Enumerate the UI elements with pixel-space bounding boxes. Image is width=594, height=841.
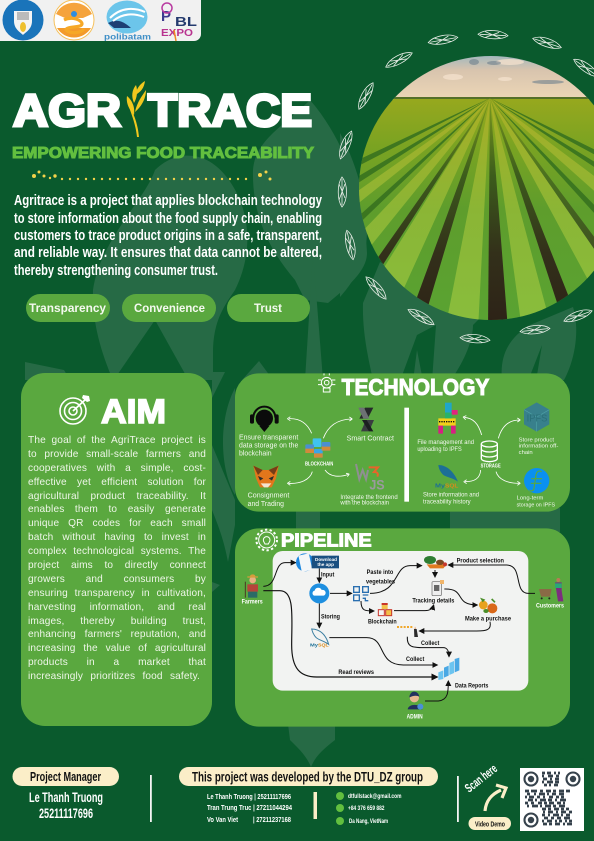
value pills	[26, 294, 310, 322]
pipeline labels: Tracking details	[412, 597, 455, 604]
pipeline labels: Collect	[421, 640, 440, 647]
icon: headset	[250, 407, 279, 432]
admin: ADMIN	[407, 714, 423, 720]
aim body text: enables them to easily generate	[28, 504, 206, 515]
blockchain group	[239, 407, 398, 508]
logo: PBL expo: BL	[175, 14, 197, 29]
admin	[407, 692, 423, 720]
pipeline labels: Make a purchase	[465, 616, 511, 623]
icon: wheat	[127, 81, 146, 137]
arrow: scan	[485, 785, 506, 811]
icon: bulb	[318, 373, 335, 392]
aim body text: increasingly prioritizes food safety.	[28, 671, 200, 682]
aim body text: effective yet efficient solution for	[28, 477, 206, 488]
text: ensure transparent	[239, 432, 298, 458]
text: smart contract: Smart Contract	[347, 434, 394, 443]
icon: blockchain cubes	[305, 438, 330, 458]
project manager: Project Manager	[30, 769, 101, 784]
label: storage: STORAGE	[481, 463, 501, 469]
text: ensure transparent: Ensure transparent	[239, 432, 298, 441]
aim body text: unique QR codes for each small	[28, 518, 206, 529]
icon: blockchain cubes	[378, 603, 392, 616]
pipeline labels	[321, 557, 511, 689]
aim body text: images, thereby building trust,	[28, 616, 206, 627]
subtitle: EMPOWERING FOOD TRACEABILITY	[12, 145, 315, 162]
contacts: Da Nang, VietNam	[349, 819, 388, 825]
logo: polibatam	[104, 0, 152, 42]
icon: stars rating	[397, 626, 418, 637]
icon: target	[59, 395, 90, 425]
title text: TRACE: TRACE	[148, 85, 312, 136]
icon: mysql: My	[435, 483, 445, 489]
team heading: This project was developed by the DTU_DZ group	[192, 770, 423, 784]
text: consignment: Consignment	[248, 491, 289, 500]
team heading	[179, 767, 438, 786]
icon: mysql: SQL	[445, 483, 459, 489]
text: long-term: storage on IPFS	[517, 503, 555, 509]
pipeline labels: Product selection	[457, 557, 504, 564]
tech divider	[404, 408, 409, 502]
icon: web3js: JS	[369, 476, 385, 492]
title	[12, 81, 315, 180]
text: store information: Store information and	[423, 493, 479, 499]
arrows: blockchain	[287, 417, 352, 485]
text: ensure transparent: blockchain	[239, 449, 272, 458]
text: consignment: and Trading	[248, 499, 284, 508]
team members: | 27211237168	[253, 815, 291, 824]
icon: customers: Customers	[536, 602, 564, 609]
panel: technology	[235, 373, 570, 512]
icon: ipfs cube	[524, 402, 549, 432]
text: store information: traceability history	[423, 499, 471, 505]
logo: polibatam: polibatam	[104, 32, 152, 42]
farm photo circle with leaf ring	[338, 30, 594, 344]
panel: pipeline	[235, 528, 570, 727]
aim body text: enhancing farmers' reputation, and	[28, 629, 206, 640]
text: store information	[423, 493, 479, 505]
icon: pinata	[438, 403, 458, 434]
crop rows	[359, 98, 594, 320]
icon: vegetables	[424, 556, 447, 568]
aim body text: The goal of the AgriTrace project is	[28, 435, 206, 446]
aim body text: products in a market that	[28, 657, 206, 668]
text: web3: with the blockchain	[339, 501, 389, 507]
pill: transparency: Transparency	[29, 303, 107, 315]
pill: convenience	[122, 294, 216, 322]
heading: technology: TECHNOLOGY	[342, 374, 489, 400]
pipeline labels: Storing	[321, 613, 340, 620]
icon: mysql	[310, 629, 329, 648]
aim body text: project aims to directly connect	[28, 560, 206, 571]
aim body text: cooperatives with a simple, cost-	[28, 463, 206, 474]
aim body text: complex technological systems. The	[28, 546, 206, 557]
download the app: the app	[317, 562, 334, 567]
contacts	[336, 792, 402, 825]
intro paragraph	[14, 192, 322, 279]
qr code	[520, 768, 584, 831]
farmers	[242, 574, 263, 605]
icon: smart contract	[358, 408, 374, 431]
icon: metamask fox	[253, 466, 279, 487]
diagram area	[273, 551, 528, 691]
text: long-term: Long-term	[517, 495, 544, 501]
text: consignment	[248, 491, 289, 508]
team members: Tran Trung Truc | 27211044294	[207, 803, 293, 812]
pill: transparency	[26, 294, 110, 322]
intro paragraph: thereby strengthening consumer trust.	[14, 262, 218, 279]
aim body text: increasing the value of agricultural	[28, 643, 206, 654]
icon: filecoin	[524, 468, 549, 493]
aim body text: harvesting information, and real	[28, 602, 206, 613]
aim body text: ensuring transparency in cultivation,	[28, 588, 206, 599]
icon: mysql: SQL	[318, 643, 329, 648]
text: ensure transparent: data storage on the	[239, 440, 298, 449]
logo: PBL expo: EXPO	[161, 27, 193, 39]
pipeline labels: Paste into	[367, 569, 393, 576]
aim body text: growers and consumers by	[28, 574, 206, 585]
icon: gear bulb	[256, 530, 277, 550]
video demo pill	[468, 817, 511, 830]
aim body text	[28, 435, 206, 682]
aim body text: batch without having to invest in	[28, 532, 206, 543]
logo: PBL expo: P	[161, 8, 171, 25]
farmers: Farmers	[242, 598, 263, 605]
team members: Vo Van Viet	[207, 815, 238, 824]
logo: ministry	[2, 0, 44, 40]
pipeline labels: Read reviews	[338, 669, 374, 676]
label: blockchain: BLOCKCHAIN	[305, 462, 333, 468]
aim body text: agricultural product traceability. It	[28, 491, 206, 502]
text: file management: uploading to IPFS	[417, 447, 462, 453]
logo strip	[0, 0, 201, 42]
heading: pipeline: PIPELINE	[281, 531, 372, 551]
text: store product	[519, 438, 558, 456]
icon: mysql: My	[310, 643, 319, 648]
video demo pill: Video Demo	[475, 820, 505, 828]
panel: aim	[21, 373, 212, 726]
pipeline labels: Blockchain	[368, 618, 397, 625]
icon: customers	[536, 578, 564, 609]
text: long-term	[517, 495, 555, 509]
icon: database	[481, 441, 497, 462]
icon: money	[479, 598, 497, 613]
icon: data chart	[438, 658, 459, 680]
pipeline labels: Data Reports	[455, 682, 489, 689]
text: web3	[339, 495, 398, 507]
dotted divider	[32, 170, 272, 180]
download the app	[296, 553, 339, 572]
icon: mysql	[435, 465, 459, 489]
project manager: Le Thanh Truong	[29, 789, 103, 805]
project manager	[12, 767, 119, 821]
icon: cloud	[309, 583, 329, 603]
pipeline labels: Collect	[406, 656, 425, 663]
text: store product: information off-	[519, 444, 558, 450]
text: web3: Integrate the frontend	[340, 495, 398, 501]
text: file management	[417, 440, 474, 453]
footer	[12, 762, 584, 831]
text: store product: chain	[519, 450, 533, 456]
team members	[207, 792, 293, 824]
pipeline labels: Input	[321, 572, 335, 579]
logo: diktisaintek	[54, 0, 94, 40]
pipeline labels: vegetables	[366, 578, 395, 585]
storage group	[417, 402, 558, 509]
icon: tracking phone	[432, 580, 444, 596]
pill: convenience: Convenience	[134, 303, 205, 315]
text: file management: File management and	[417, 440, 474, 446]
icon: ipfs cube: IPFS	[527, 414, 547, 425]
contacts: dtfullstack@gmail.com	[348, 794, 402, 800]
pill: trust: Trust	[254, 303, 282, 315]
pill: trust	[227, 294, 310, 322]
contacts: +84 376 659 882	[348, 806, 385, 812]
logo: PBL expo	[161, 3, 197, 41]
team members: Le Thanh Truong | 25211117696	[207, 792, 291, 801]
download the app: Download	[315, 557, 337, 562]
icon: web3js	[356, 464, 385, 492]
icon: qr	[354, 587, 368, 601]
aim body text: to provide small-scale farmers and	[28, 449, 206, 460]
project manager: 25211117696	[39, 805, 93, 821]
arrows: storage	[463, 416, 520, 485]
title text: AGR: AGR	[13, 85, 121, 136]
text: store product: Store product	[519, 438, 554, 444]
pipeline arrows	[263, 563, 535, 701]
